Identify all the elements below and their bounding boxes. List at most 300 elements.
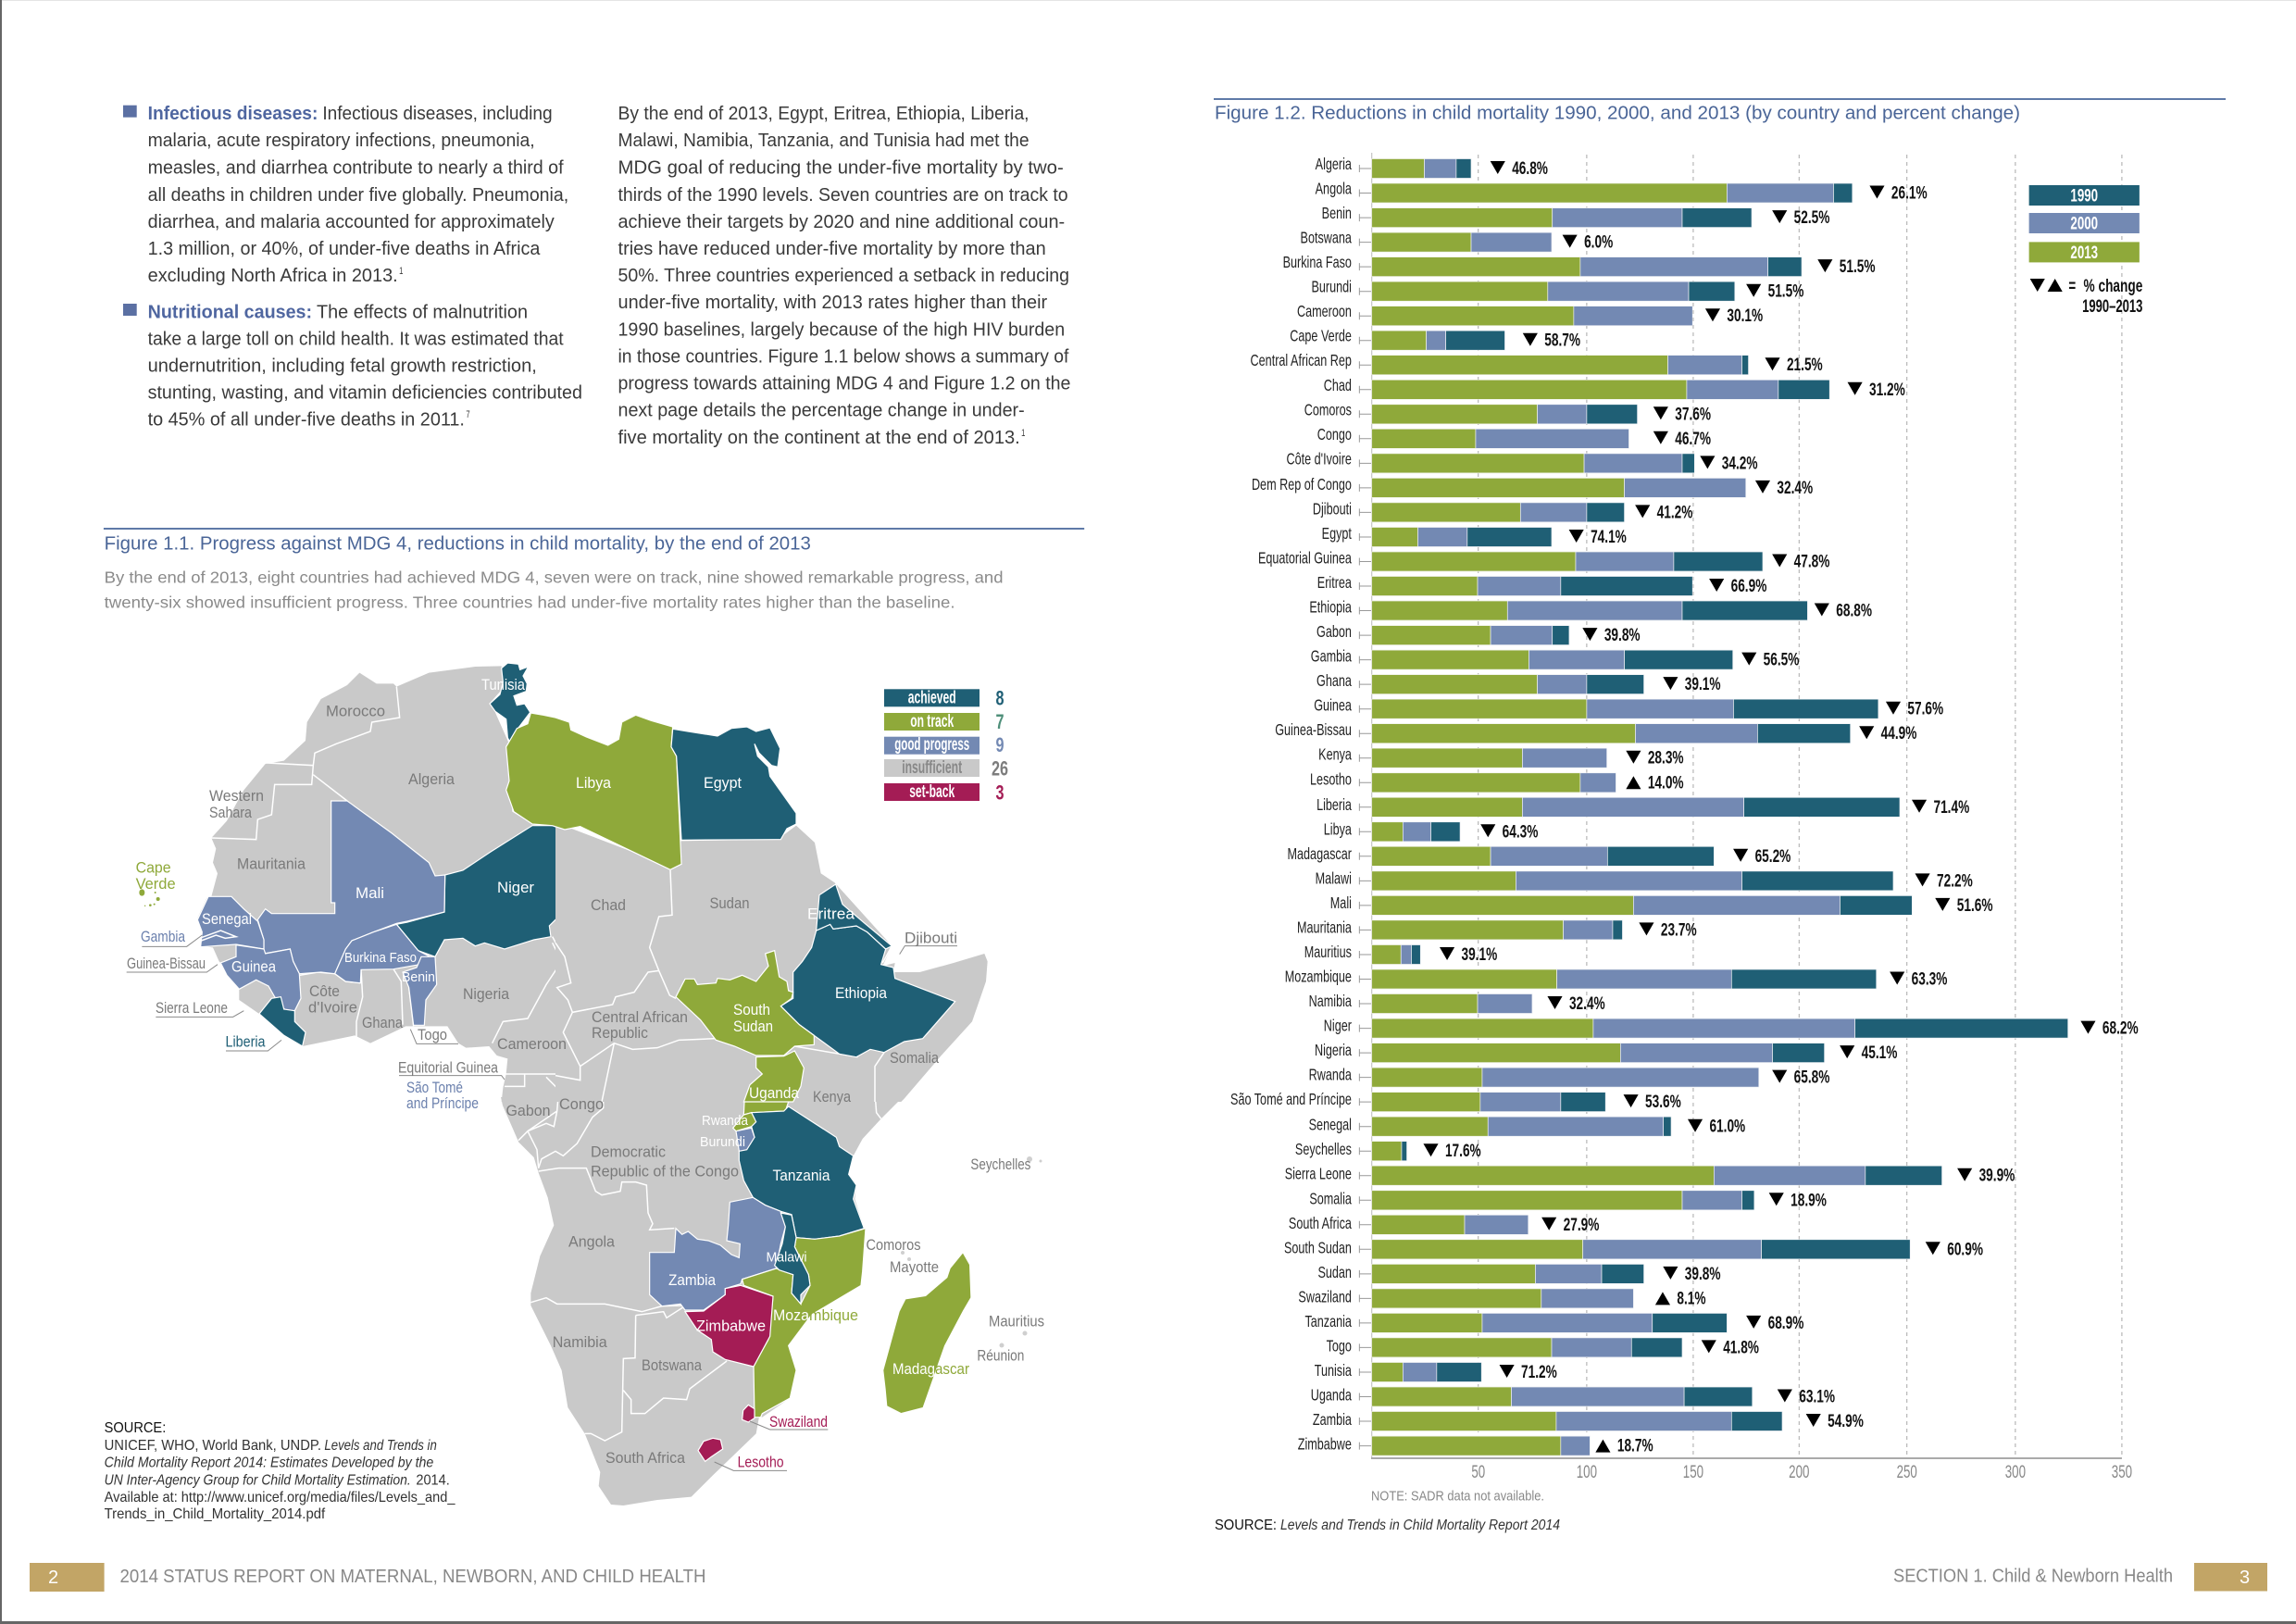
legend: years and percent change: =: [2068, 277, 2076, 296]
country: Uganda south: [743, 1083, 794, 1115]
paragraph: nutritional causes: 7: [466, 409, 470, 420]
row: Zambia: [1313, 1411, 1864, 1431]
row: Madagascar: Madagascar: [1288, 845, 1352, 863]
map labels: Burundi: [700, 1134, 745, 1150]
row: Somalia: [1309, 1190, 1827, 1210]
paragraph: nutritional causes: stunting, wasting, and vitamin deficiencies contributed: [148, 381, 582, 403]
country: Tunisia: [490, 663, 530, 744]
row: São Tomé and Príncipe: São Tomé and Príncipe: [1230, 1091, 1352, 1109]
x axis labels: 200: [1789, 1463, 1809, 1482]
map labels: Guinea-Bissau: [127, 956, 206, 972]
row: Kenya: [1318, 746, 1684, 768]
map labels: Côte: [309, 983, 340, 1000]
country: Niger: [396, 826, 577, 956]
row: Rwanda: Rwanda: [1309, 1067, 1352, 1084]
map labels: Swaziland: [769, 1414, 828, 1430]
map labels: South Africa: [605, 1450, 686, 1467]
map: gap filler along the Gabon coast: [501, 1097, 523, 1142]
x axis labels: 350: [2112, 1463, 2132, 1482]
text block: right column MDG summary: tries have reduced under-five mortality by more than: [618, 237, 1046, 259]
row: Tunisia: Tunisia: [1315, 1362, 1352, 1380]
chart: child mortality stacked bars by country: [1230, 153, 2142, 1482]
row: Central African Rep: 21.5%: [1787, 355, 1823, 375]
legend: map progress categories: 3: [996, 781, 1004, 804]
paragraph: infectious diseases: 1: [399, 266, 403, 277]
row: Malawi: 72.2%: [1937, 870, 1973, 891]
row: Tanzania: 68.9%: [1768, 1313, 1803, 1333]
text block: right column MDG summary: Malawi, Namibia, Tanzania, and Tunisia had met the: [618, 129, 1029, 151]
map labels: [127, 677, 1044, 1470]
row: Djibouti: Djibouti: [1313, 500, 1352, 518]
source: Figure 1.1: Available at: http://www.unicef.org/media/files/Levels_and_: [105, 1489, 455, 1505]
row: Burkina Faso: [1283, 254, 1876, 277]
x axis labels: 300: [2005, 1463, 2026, 1482]
country: Mali: [257, 801, 445, 974]
map labels: Mayotte: [890, 1259, 939, 1276]
country: Liberia: [259, 997, 306, 1046]
map: Africa by MDG 4 progress: [127, 663, 1044, 1505]
row: Guinea: Guinea: [1314, 697, 1352, 715]
text block: right column MDG summary: achieve their targets by 2020 and nine additional coun-: [618, 210, 1065, 232]
leader lines for southern labels: [715, 1421, 828, 1470]
map labels: Mali: [356, 885, 384, 902]
row: Sierra Leone: 39.9%: [1979, 1165, 2015, 1185]
legend: map progress categories: good progress: [894, 735, 969, 755]
row: Uganda: 63.1%: [1799, 1386, 1835, 1406]
country: Madagascar: [883, 1254, 970, 1413]
row: Congo: Congo: [1317, 426, 1352, 443]
row: Algeria: Algeria: [1316, 156, 1352, 174]
legend: years and percent change: 2000: [2070, 214, 2098, 233]
country: Tanzania: [739, 1106, 864, 1239]
legend: map progress categories: set-back: [909, 782, 955, 802]
map labels: and Príncipe: [406, 1095, 479, 1112]
x axis labels: 100: [1577, 1463, 1597, 1482]
map labels: Ghana: [362, 1015, 404, 1031]
row: Namibia: Namibia: [1309, 993, 1352, 1011]
legend: map progress categories: [884, 687, 1008, 804]
row: Uganda: [1311, 1386, 1835, 1406]
heading: Figure 1.1 title and intro: By the end of 2013, eight countries had achieved MDG 4, seven were on track, nine showed remarkable progress, and: [105, 569, 1004, 587]
row: Chad: 31.2%: [1869, 379, 1905, 399]
legend: map progress categories: 8: [996, 687, 1004, 709]
country: Benin: [403, 956, 437, 1025]
row: Kenya: Kenya: [1318, 746, 1352, 764]
row: Sierra Leone: Sierra Leone: [1285, 1166, 1352, 1183]
country: Guinea: [220, 945, 301, 1012]
country: Swaziland: [742, 1405, 755, 1422]
country: Mozambique: [742, 1229, 866, 1418]
footer: right page: 3: [2240, 1568, 2250, 1588]
text block: left column causes of mortality: [123, 102, 1071, 447]
country: Burundi: [736, 1128, 755, 1151]
heading: Figure 1.1 title and intro: twenty-six showed insufficient progress. Three countries had under-five mortality rates higher than the baseline.: [105, 594, 955, 612]
row: Comoros: [1304, 401, 1711, 424]
country: Rwanda: [733, 1113, 756, 1131]
text block: right column MDG summary: thirds of the 1990 levels. Seven countries are on track to: [618, 183, 1068, 206]
row: South Africa: South Africa: [1289, 1215, 1352, 1232]
row: Mali: [1330, 894, 1993, 916]
row: Mozambique: 63.3%: [1912, 968, 1947, 989]
map labels: Niger: [497, 880, 535, 896]
text block: right column MDG summary: 1: [1021, 428, 1025, 439]
paragraph: infectious diseases: 1.3 million, or 40%, of under-five deaths in Africa: [148, 237, 541, 259]
legend: years and percent change: 1990–2013: [2082, 297, 2142, 317]
row: Ghana: 39.1%: [1685, 674, 1721, 694]
row: Gabon: [1316, 623, 1641, 645]
row: Eritrea: 66.9%: [1731, 576, 1766, 596]
heading: Figure 1.1 title and intro: Figure 1.1. Progress against MDG 4, reductions in child mortality, by the end of 2013: [105, 532, 811, 554]
legend: years and percent change: 2013: [2070, 244, 2098, 263]
row: Congo: 46.7%: [1675, 428, 1711, 448]
row: Chad: Chad: [1324, 377, 1352, 394]
country: Ethiopia: [780, 924, 955, 1057]
map labels: Uganda: [749, 1085, 800, 1102]
paragraph: infectious diseases: all deaths in children under five globally. Pneumonia,: [148, 183, 568, 206]
row: South Africa: [1289, 1214, 1599, 1234]
row: Nigeria: Nigeria: [1315, 1042, 1352, 1060]
map labels: Botswana: [642, 1357, 703, 1374]
heading: Figure 1.2 title: Figure 1.2. Reductions in child mortality 1990, 2000, and 2013 (by country and percent change): [1215, 103, 2020, 124]
map labels: Gabon: [505, 1103, 550, 1119]
map labels: Angola: [568, 1234, 616, 1251]
row: South Africa: 27.9%: [1564, 1214, 1599, 1234]
country: Burkina Faso: [335, 924, 429, 983]
row: Algeria: [1316, 156, 1548, 179]
legend: years and percent change: % change: [2084, 277, 2142, 296]
row: Gambia: Gambia: [1311, 648, 1352, 666]
row: South Sudan: South Sudan: [1284, 1239, 1352, 1257]
map labels: Malawi: [767, 1250, 807, 1266]
row: South Sudan: [1284, 1239, 1983, 1259]
row: Ghana: Ghana: [1316, 672, 1352, 691]
map labels: Liberia: [226, 1034, 266, 1051]
row: Togo: Togo: [1327, 1337, 1352, 1355]
row: Mauritania: 23.7%: [1661, 919, 1697, 940]
map labels: Senegal: [202, 911, 252, 928]
map labels: d'Ivoire: [308, 1000, 357, 1017]
row: Angola: [1316, 180, 1928, 203]
country: Zambia: [650, 1197, 785, 1310]
legend: map progress categories: on track: [910, 712, 954, 731]
row: Gambia: [1311, 648, 1799, 669]
bullet: infectious diseases: [123, 106, 137, 118]
source: Figure 1.2: Levels and Trends in Child Mortality Report 2014: [1280, 1518, 1560, 1533]
paragraph: infectious diseases: excluding North Africa in 2013.: [148, 264, 398, 286]
text block: right column MDG summary: under-five mortality, with 2013 rates higher than their: [618, 291, 1047, 313]
row: Mauritania: Mauritania: [1297, 918, 1352, 937]
row: Equatorial Guinea: 47.8%: [1794, 551, 1829, 571]
row: Somalia: Somalia: [1309, 1190, 1352, 1208]
note: SADR data: NOTE: SADR data not available.: [1371, 1489, 1544, 1505]
row: Seychelles: 17.6%: [1445, 1141, 1481, 1161]
footer: left page: [30, 1563, 705, 1592]
row: Niger: [1324, 1018, 2139, 1038]
map labels: Togo: [418, 1027, 447, 1043]
row: Cape Verde: 58.7%: [1544, 330, 1580, 350]
map labels: Democratic: [591, 1144, 666, 1161]
row: Zimbabwe: Zimbabwe: [1298, 1436, 1352, 1454]
map labels: Guinea: [231, 959, 277, 976]
row: Mauritania: [1297, 918, 1697, 940]
row: Somalia: 18.9%: [1791, 1190, 1827, 1210]
map labels: ascar: [935, 1361, 969, 1378]
map labels: Egypt: [704, 775, 742, 792]
row: Angola: Angola: [1316, 180, 1352, 198]
map labels: Somalia: [890, 1050, 940, 1067]
row: Niger: 68.2%: [2103, 1018, 2139, 1038]
map labels: Equitorial Guinea: [398, 1059, 499, 1076]
row: Mali: Mali: [1330, 894, 1352, 913]
heading: nutritional causes: Nutritional causes:: [148, 301, 312, 322]
row: Swaziland: Swaziland: [1298, 1288, 1352, 1306]
x axis labels: 250: [1897, 1463, 1917, 1482]
row: Congo: [1317, 426, 1711, 448]
row: Mozambique: Mozambique: [1285, 968, 1352, 986]
map labels: Burkina Faso: [344, 950, 417, 966]
row: Egypt: 74.1%: [1591, 527, 1627, 547]
map labels: Kenya: [813, 1089, 852, 1106]
country: Uganda: [743, 1051, 804, 1102]
map labels: Réunion: [977, 1348, 1024, 1365]
row: Burundi: Burundi: [1311, 279, 1352, 296]
paragraph: infectious diseases: Infectious diseases, including: [322, 102, 553, 124]
map labels: Nigeria: [463, 986, 510, 1003]
paragraph: infectious diseases: malaria, acute respiratory infections, pneumonia,: [148, 129, 535, 151]
map labels: Chad: [591, 897, 626, 914]
map labels: Republic of the Congo: [591, 1164, 739, 1181]
row: Lesotho: Lesotho: [1310, 770, 1352, 789]
row: Malawi: Malawi: [1316, 869, 1352, 888]
row: Botswana: 6.0%: [1584, 231, 1613, 252]
map labels: Zimbabwe: [696, 1318, 766, 1335]
country: Libya: [506, 713, 681, 869]
row: Cameroon: 30.1%: [1727, 306, 1763, 326]
row: Uganda: Uganda: [1311, 1386, 1352, 1405]
map labels: Tanzania: [772, 1168, 830, 1184]
row: Gambia: 56.5%: [1764, 649, 1799, 669]
text block: right column MDG summary: [618, 102, 1071, 447]
map labels: Djibouti: [905, 930, 957, 946]
row: Burundi: [1311, 279, 1803, 301]
row: Cape Verde: Cape Verde: [1290, 328, 1352, 345]
map labels: Seychelles: [970, 1156, 1030, 1173]
paragraph: infectious diseases: diarrhea, and malaria accounted for approximately: [148, 210, 555, 232]
row: Madagascar: [1288, 845, 1791, 866]
source: Figure 1.1: SOURCE:: [105, 1419, 166, 1435]
map labels: Sierra Leone: [156, 1000, 228, 1017]
map labels: Republic: [592, 1025, 648, 1042]
map labels: Namibia: [553, 1334, 607, 1351]
legend: years and percent change: 1990: [2070, 186, 2098, 206]
row: Equatorial Guinea: Equatorial Guinea: [1258, 549, 1352, 568]
row: Zambia: Zambia: [1313, 1411, 1352, 1430]
row: Burkina Faso: Burkina Faso: [1283, 254, 1352, 272]
row: Dem Rep of Congo: Dem Rep of Congo: [1252, 476, 1352, 494]
row: Eritrea: Eritrea: [1317, 574, 1352, 593]
row: Nigeria: 45.1%: [1862, 1043, 1897, 1063]
legend: map progress categories: 9: [996, 733, 1004, 756]
map labels: Western: [209, 788, 264, 805]
footer: right page: SECTION 1. Child & Newborn Health: [1893, 1567, 2173, 1587]
row: Mozambique: [1285, 968, 1947, 989]
row: Sudan: [1317, 1264, 1721, 1284]
row: Côte d'Ivoire: Côte d'Ivoire: [1287, 450, 1352, 468]
paragraph: nutritional causes: take a large toll on child health. It was estimated that: [148, 328, 564, 349]
country: Eritrea: [817, 884, 892, 949]
map labels: Mauritius: [989, 1313, 1044, 1330]
row: Benin: Benin: [1322, 205, 1352, 223]
row: Tanzania: Tanzania: [1304, 1313, 1352, 1331]
map labels: Madag: [892, 1361, 935, 1378]
row: Togo: 41.8%: [1723, 1337, 1759, 1357]
country: Lesotho: [698, 1438, 723, 1461]
heading: infectious diseases: Infectious diseases:: [148, 102, 318, 124]
map labels: Lesotho: [738, 1454, 784, 1470]
footer: right page: [1893, 1563, 2267, 1591]
map labels: mbique: [809, 1307, 858, 1324]
row: Senegal: Senegal: [1309, 1117, 1352, 1134]
row: Malawi: [1316, 869, 1973, 891]
row: Gabon: Gabon: [1316, 623, 1352, 642]
row: São Tomé and Príncipe: 53.6%: [1645, 1092, 1681, 1112]
country: Malawi: [775, 1213, 810, 1304]
row: Guinea-Bissau: Guinea-Bissau: [1275, 721, 1352, 740]
x axis labels: 150: [1683, 1463, 1703, 1482]
row: Cameroon: [1297, 303, 1763, 326]
paragraph: nutritional causes: undernutrition, including fetal growth restriction,: [148, 355, 537, 376]
text block: right column MDG summary: next page details the percentage change in under-: [618, 399, 1025, 420]
source: Figure 1.1: Child Mortality Report 2014: Estimates Developed by the: [105, 1455, 433, 1470]
row: Cape Verde: [1290, 328, 1580, 350]
map labels: Gambia: [141, 929, 186, 945]
row: Chad: [1324, 377, 1905, 399]
row: Kenya: 28.3%: [1648, 747, 1684, 768]
map: north-west Africa: [127, 663, 577, 1102]
row: Seychelles: Seychelles: [1295, 1141, 1352, 1159]
row: Rwanda: 65.8%: [1794, 1067, 1829, 1087]
row: Equatorial Guinea: [1258, 549, 1829, 571]
row: Ethiopia: [1309, 598, 1872, 620]
row: Tunisia: 71.2%: [1521, 1362, 1557, 1382]
leader lines for western labels: [127, 935, 505, 1080]
row: Angola: 26.1%: [1891, 182, 1928, 203]
map labels: Tunisia: [481, 677, 526, 693]
row: Benin: 52.5%: [1794, 207, 1829, 228]
map labels: Sudan: [733, 1018, 773, 1035]
map labels: Comoros: [867, 1237, 920, 1254]
row: Namibia: [1309, 993, 1605, 1014]
islands: Cape Verde: [139, 889, 160, 906]
row: Gabon: 39.8%: [1604, 625, 1641, 645]
row: Egypt: [1322, 525, 1627, 547]
row: Liberia: Liberia: [1316, 796, 1352, 814]
chart grid and axes: [1371, 153, 2122, 1458]
text block: right column MDG summary: 1990 baselines, largely because of the high HIV burden: [618, 319, 1065, 340]
bullet: nutritional causes: [123, 304, 137, 316]
row: Sudan: 39.8%: [1685, 1264, 1721, 1284]
row: Dem Rep of Congo: 32.4%: [1777, 478, 1813, 498]
map labels: Verde: [136, 876, 176, 893]
row: Guinea: [1314, 697, 1943, 718]
row: Dem Rep of Congo: [1252, 476, 1813, 498]
text block: right column MDG summary: MDG goal of reducing the under-five mortality by two-: [618, 156, 1064, 178]
row: Djibouti: [1313, 500, 1692, 522]
row: Ghana: [1316, 672, 1721, 694]
legend: map progress categories: 7: [996, 710, 1004, 733]
islands: Seychelles, Comoros, Mauritius, Reunion: [901, 1156, 1042, 1348]
row: Botswana: Botswana: [1301, 230, 1352, 247]
row: Djibouti: 41.2%: [1657, 502, 1692, 522]
row: Côte d'Ivoire: [1287, 450, 1758, 473]
text block: right column MDG summary: By the end of 2013, Egypt, Eritrea, Ethiopia, Liberia,: [618, 102, 1029, 124]
row: Mauritius: [1304, 943, 1497, 965]
row: Mauritius: 39.1%: [1461, 944, 1497, 965]
row: Seychelles: [1295, 1141, 1481, 1161]
row: Burkina Faso: 51.5%: [1840, 256, 1876, 277]
map labels: São Tomé: [406, 1080, 463, 1096]
row: Nigeria: [1315, 1042, 1897, 1063]
source: Figure 1.1: Levels and Trends in: [324, 1437, 437, 1453]
row: Swaziland: 8.1%: [1677, 1288, 1706, 1308]
row: Senegal: 61.0%: [1709, 1116, 1745, 1136]
row: Madagascar: 65.2%: [1755, 845, 1791, 866]
paragraph: nutritional causes: [148, 301, 582, 430]
legend: map progress categories: 26: [992, 757, 1008, 780]
source: Figure 1.1: 2014.: [416, 1472, 450, 1488]
paragraph: nutritional causes: The effects of malnutrition: [317, 301, 528, 322]
map: north-east Africa: [506, 713, 988, 1102]
country: Senegal: [197, 896, 264, 949]
paragraph: infectious diseases: measles, and diarrhea contribute to nearly a third of: [148, 156, 564, 178]
row: Libya: Libya: [1324, 820, 1352, 839]
map labels: South: [733, 1002, 770, 1018]
map labels: Zambia: [668, 1272, 717, 1289]
map labels: Moza: [773, 1307, 810, 1324]
row: Sierra Leone: [1285, 1165, 2015, 1185]
row: Guinea-Bissau: [1275, 721, 1916, 743]
source: Figure 1.1: Trends_in_Child_Mortality_2014.pdf: [105, 1505, 325, 1521]
row: Zimbabwe: 18.7%: [1617, 1435, 1653, 1455]
row: Burundi: 51.5%: [1768, 281, 1803, 301]
row: Central African Rep: Central African Rep: [1251, 352, 1352, 370]
row: Namibia: 32.4%: [1569, 993, 1605, 1014]
map labels: Congo: [559, 1096, 604, 1113]
row: Mauritius: Mauritius: [1304, 943, 1352, 962]
row: Libya: 64.3%: [1503, 821, 1538, 842]
heading: Figure 1.1 title and intro: [104, 528, 1084, 612]
source: Figure 1.1: UN Inter-Agency Group for Child Mortality Estimation.: [105, 1472, 411, 1488]
row: Comoros: 37.6%: [1675, 404, 1711, 424]
row: Eritrea: [1317, 574, 1766, 596]
row: Zimbabwe: [1298, 1435, 1653, 1455]
row: Côte d'Ivoire: 34.2%: [1722, 453, 1758, 473]
map labels: Libya: [576, 775, 612, 792]
map labels: Sahara: [209, 805, 253, 821]
map: southern Africa: [518, 1081, 970, 1505]
map labels: Benin: [402, 969, 435, 985]
country: Egypt: [671, 727, 796, 840]
row: South Sudan: 60.9%: [1947, 1239, 1983, 1259]
text block: right column MDG summary: progress towards attaining MDG 4 and Figure 1.2 on the: [618, 372, 1071, 394]
map labels: Mauritania: [237, 856, 306, 872]
country: Gambia river border: [201, 931, 236, 941]
legend: map progress categories: insufficient: [902, 758, 963, 778]
row: São Tomé and Príncipe: [1230, 1091, 1681, 1112]
row: Egypt: Egypt: [1322, 525, 1352, 543]
row: Libya: [1324, 820, 1538, 842]
country: Zimbabwe: [685, 1285, 773, 1367]
